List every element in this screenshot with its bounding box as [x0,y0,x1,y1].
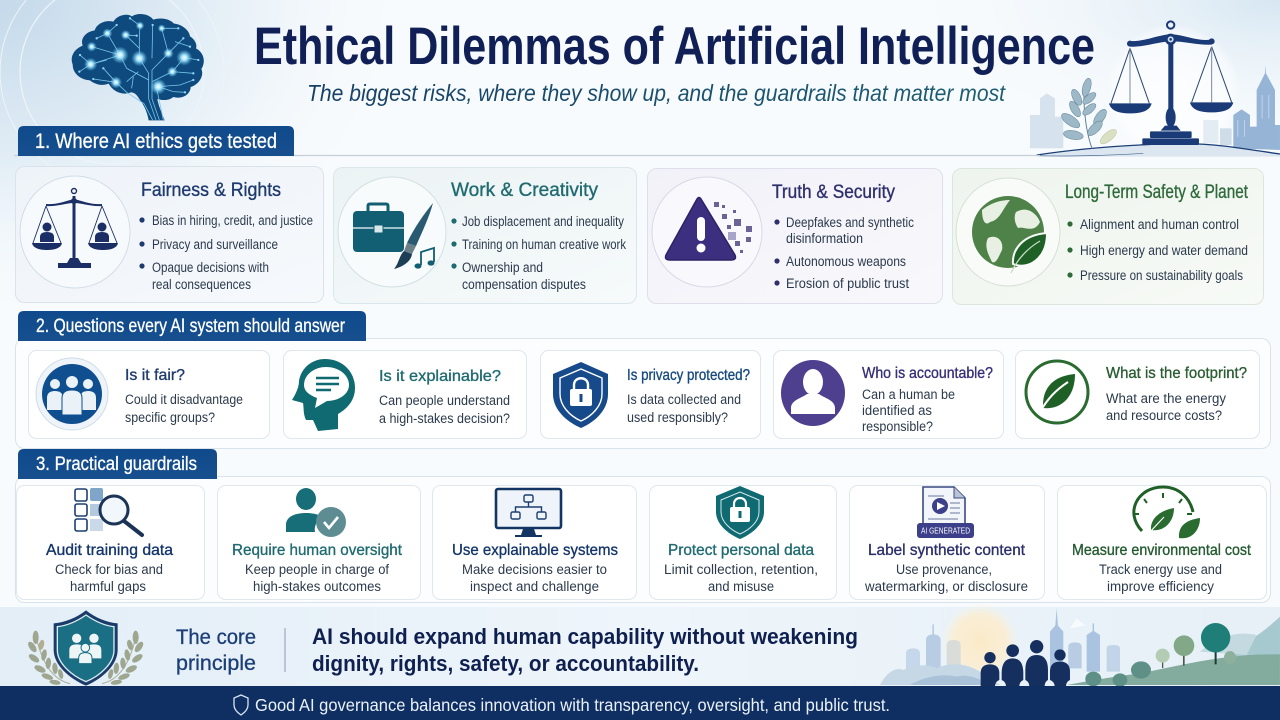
guardrail card: environmental cost [1058,486,1266,600]
icon: small shield [234,695,248,715]
icon: briefcase, brush and note [353,203,434,269]
guardrail card: synthetic content [850,486,1044,600]
bullet list [139,213,313,292]
question card: explainable [284,350,526,438]
icon: shield with people and laurels [26,610,145,686]
illustration: scales, plant and city [1030,21,1280,157]
icon: warning triangle with pixels [666,198,752,260]
section header 1 [14,126,1040,156]
guardrail text: Audit training data [46,542,173,559]
icon: data grid and magnifier [75,488,142,535]
question text: Is it explainable? [379,368,501,385]
label: the core principle [176,626,256,675]
guardrail text [864,542,1028,594]
section header 2 [18,311,366,341]
question text: Who is accountable? [862,365,993,382]
icon: circuit brain [72,14,204,120]
principle statement: AI should expand human capability without weakening [312,624,858,649]
bullet list: Deepfakes and synthetic [786,215,914,230]
subtitle: The biggest risks, where they show up, and the guardrails that matter most [307,80,1006,106]
bullet list: Training on human creative work [462,237,626,252]
section 3: guardrails panel [16,449,1270,602]
question text: Could it disadvantage [125,392,243,407]
question text: Is privacy protected? [627,367,750,384]
principle statement: dignity, rights, safety, or accountability. [312,651,699,676]
bullet list: Alignment and human control [1080,217,1239,232]
question text: Is data collected and [627,392,741,407]
section header 1: 1. Where AI ethics gets tested [35,130,277,153]
icon: scales with people [32,188,118,268]
guardrail text: high-stakes outcomes [253,579,381,594]
guardrail text: Limit collection, retention, [664,562,818,577]
bullet list [1067,217,1248,283]
bullet list: High energy and water demand [1080,243,1248,258]
bullet list: Job displacement and inequality [462,214,624,229]
footer bar [0,686,1280,720]
guardrail text [664,542,818,594]
bullet list: Opaque decisions with [152,260,269,275]
illustration: skyline, sun, hills and people [880,603,1280,687]
guardrail text [1072,542,1251,594]
question text: Can people understand [379,393,510,408]
question text: used responsibly? [627,410,728,425]
guardrail text: Use explainable systems [452,542,618,559]
question card: privacy [540,350,760,438]
icon: group in circle [36,358,108,430]
title: Ethical Dilemmas of Artificial Intelligence [254,17,1095,76]
guardrail card: explainable systems [432,486,636,600]
bullet list: Erosion of public trust [786,276,909,291]
heading: Fairness & Rights [141,180,281,201]
heading: Work & Creativity [451,180,598,201]
panel: truth and security [648,168,942,304]
question text: What are the energy [1106,391,1226,406]
section header 3 [18,449,217,479]
question text [862,365,993,434]
guardrail text: Label synthetic content [868,542,1026,559]
guardrail text [46,542,173,594]
question text: identified as [862,403,932,418]
bullet list [451,214,626,292]
bullet list: Autonomous weapons [786,254,906,269]
question text: What is the footprint? [1106,365,1247,382]
question text: Is it fair? [125,367,185,384]
bullet list: disinformation [786,231,863,246]
guardrail card: personal data [650,486,836,600]
guardrail text: Measure environmental cost [1072,542,1251,559]
guardrail text: Make decisions easier to [462,562,607,577]
bullet list: real consequences [152,277,251,292]
icon: document with AI generated label [917,487,974,538]
section header 3: 3. Practical guardrails [36,454,197,475]
guardrail text: Use provenance, [896,562,992,577]
principle statement [312,624,858,676]
guardrail text [232,542,403,594]
icon: globe with leaf [972,196,1047,273]
question text [379,368,510,426]
question text: a high-stakes decision? [379,411,510,426]
guardrail text: Track energy use and [1099,562,1222,577]
core principle band [0,603,1280,687]
guardrail text: Protect personal data [668,542,814,559]
bullet list: Privacy and surveillance [152,237,278,252]
guardrail text: improve efficiency [1107,579,1214,594]
guardrail text: Require human oversight [232,542,403,559]
icon: person with check [286,488,346,537]
guardrail text: Check for bias and [55,562,163,577]
guardrail text: and misuse [708,579,774,594]
footer message: Good AI governance balances innovation with transparency, oversight, and public trust. [255,695,890,715]
icon: head with speech bubble [292,359,355,431]
guardrail text: inspect and challenge [470,579,599,594]
question text: Can a human be [862,387,955,402]
question text: and resource costs? [1106,408,1222,423]
question text [627,367,750,425]
icon: monitor with flow chart [496,489,561,537]
guardrail text: watermarking, or disclosure [864,579,1028,594]
heading: Truth & Security [772,182,895,203]
guardrail card: oversight [218,486,420,600]
icon: person in circle [781,360,845,426]
guardrail text: harmful gaps [70,579,146,594]
panel: fairness and rights [16,166,324,302]
panel: work and creativity [334,168,636,304]
guardrail text: Keep people in charge of [245,562,389,577]
bullet list: Bias in hiring, credit, and justice [152,213,313,228]
icon: leaf in ring [1026,361,1088,423]
bullet list [774,215,914,291]
question text [125,367,243,425]
question text: specific groups? [125,410,215,425]
bullet list: Ownership and [462,260,543,275]
icon: teal shield with lock [716,486,764,539]
question card: fair [28,350,270,438]
guardrail card: audit [16,486,204,600]
icon: shield with lock [553,362,608,428]
question card: footprint [1016,350,1260,438]
guardrail text [452,542,618,594]
bullet list: compensation disputes [462,277,586,292]
icon: gauge with leaves [1134,487,1200,538]
question text [1106,365,1247,423]
question card: accountable [774,350,1004,438]
section 2: questions panel [16,311,1270,448]
bullet list: Pressure on sustainability goals [1080,268,1243,283]
label: the core principle: principle [176,652,256,675]
question text: responsible? [862,419,933,434]
icon: document with AI generated label: AI GENERATED [921,526,970,536]
label: the core principle: The core [176,626,256,649]
section header 2: 2. Questions every AI system should answer [36,316,346,337]
panel: long-term safety and planet [952,168,1264,304]
